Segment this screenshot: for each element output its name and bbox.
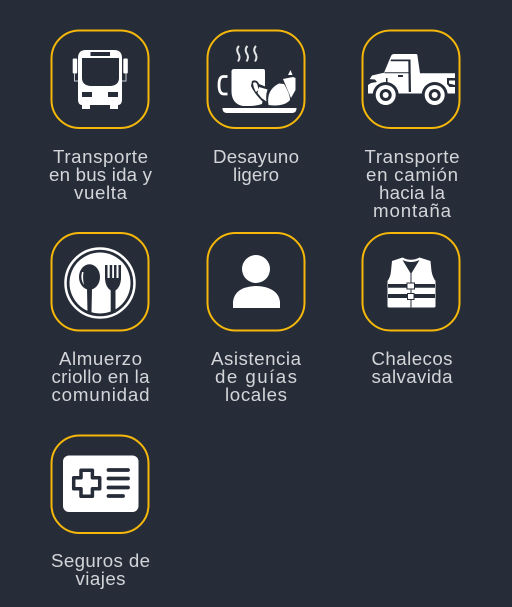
icon frame: breakfast bbox=[208, 30, 304, 128]
label: lunch: comunidad bbox=[52, 384, 150, 405]
item: truck transport bbox=[362, 30, 460, 221]
icon: plate with spoon and fork bbox=[66, 248, 134, 318]
label: vests: salvavida bbox=[372, 366, 453, 387]
item: life vests bbox=[362, 233, 460, 387]
item: travel insurance bbox=[51, 436, 150, 589]
label: bus: vuelta bbox=[74, 182, 128, 203]
label: breakfast: Desayuno bbox=[213, 146, 299, 167]
item: bus transport bbox=[49, 30, 153, 203]
icon frame: lunch bbox=[52, 233, 148, 330]
icon: pickup truck bbox=[368, 54, 455, 108]
icon: life vest bbox=[388, 258, 436, 308]
label: guides: de guías bbox=[215, 366, 297, 387]
label: truck: montaña bbox=[373, 200, 452, 221]
label: truck: Transporte bbox=[364, 146, 460, 167]
label: bus: en bus ida y bbox=[49, 164, 153, 185]
label: truck: en camión bbox=[366, 164, 458, 185]
icon: bus bbox=[73, 50, 128, 109]
icon frame: vests bbox=[362, 233, 460, 330]
icon frame: guides bbox=[208, 233, 304, 330]
label: guides: Asistencia bbox=[211, 348, 302, 369]
icon: insurance card bbox=[63, 456, 138, 512]
label: bus: Transporte bbox=[53, 146, 148, 167]
icon frame: insurance bbox=[52, 436, 148, 533]
icon: coffee and croissant bbox=[219, 46, 296, 113]
label: insurance: viajes bbox=[76, 568, 126, 589]
icon frame: bus bbox=[52, 30, 148, 128]
icon: person bbox=[233, 255, 280, 308]
item: lunch bbox=[52, 233, 150, 405]
item: breakfast bbox=[208, 30, 304, 185]
item: local guides bbox=[208, 233, 304, 405]
label: vests: Chalecos bbox=[372, 348, 452, 369]
label: guides: locales bbox=[225, 384, 287, 405]
label: insurance: Seguros de bbox=[51, 550, 150, 571]
label: lunch: criollo en la bbox=[52, 366, 150, 387]
icon frame: truck bbox=[362, 30, 460, 128]
label: truck: hacia la bbox=[379, 182, 446, 203]
label: breakfast: ligero bbox=[233, 164, 279, 185]
label: lunch: Almuerzo bbox=[59, 348, 142, 369]
